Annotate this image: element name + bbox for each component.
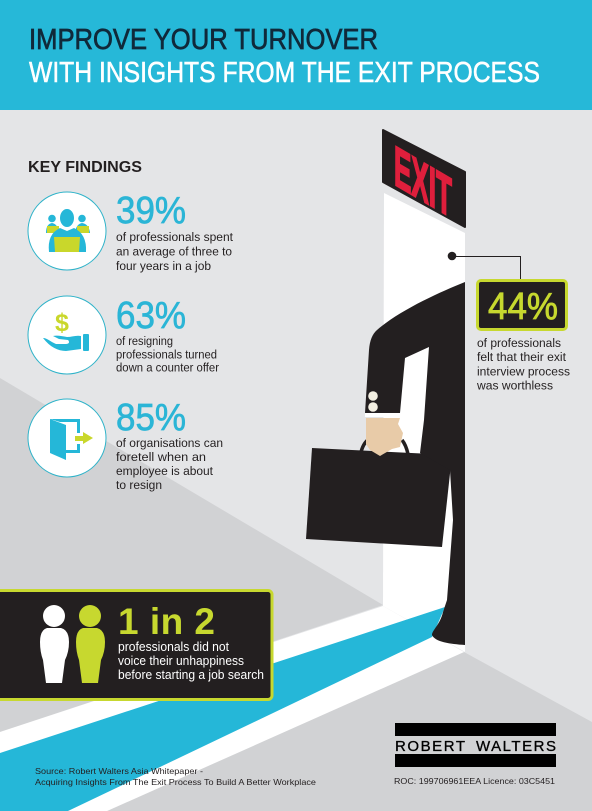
icon: team with laptop (28, 192, 106, 270)
businessman with briefcase (306, 282, 465, 645)
description (476, 336, 570, 392)
description: employee is about (116, 464, 214, 478)
description: professionals turned (116, 348, 217, 362)
description: of resigning (116, 334, 173, 348)
heading: key findings: KEY FINDINGS (28, 159, 142, 176)
white light path (0, 606, 464, 811)
white door opening (383, 193, 465, 652)
stat: 63%: 63% (116, 295, 186, 337)
description: voice their unhappiness (118, 653, 244, 668)
description: professionals did not (118, 639, 229, 654)
description (116, 334, 219, 374)
description: was worthless (476, 378, 553, 392)
description: down a counter offer (116, 360, 219, 374)
jacket and leg (365, 282, 465, 645)
briefcase handle (361, 438, 408, 454)
icon: hand with dollar: $ (55, 309, 69, 337)
right floor shade (107, 652, 592, 811)
jacket buttons (368, 391, 378, 412)
briefcase (306, 448, 452, 547)
registration text: ROC: 199706961EEA Licence: 03C5451 (394, 776, 555, 786)
description: four years in a job (116, 259, 211, 273)
shirt cuff (365, 413, 400, 417)
leader line (452, 256, 520, 281)
hand (366, 418, 403, 456)
description: to resign (116, 478, 162, 492)
left floor shade (0, 378, 383, 732)
stat: 39%: 39% (116, 190, 186, 232)
exit sign (383, 130, 465, 230)
exit sign: EXIT (394, 133, 452, 230)
description (118, 639, 264, 682)
source note: Acquiring Insights From The Exit Process To Build A Better Workplace (35, 777, 316, 787)
description: of organisations can (116, 436, 223, 450)
floor and door-light shapes (0, 193, 592, 811)
finding 1: 39% (28, 190, 234, 273)
stat: 44%: 44% (488, 286, 558, 328)
header band (0, 0, 592, 110)
description: foretell when an (116, 450, 206, 464)
description: interview process (477, 364, 570, 378)
icon: lime person (76, 605, 105, 683)
description: before starting a job search (118, 667, 264, 682)
logo: Robert Walters: WALTERS (476, 738, 556, 755)
description: an average of three to (116, 244, 232, 258)
blue carpet path (0, 607, 445, 811)
icon: white person (40, 605, 69, 683)
stat box (478, 280, 566, 330)
finding 3: 85% (28, 397, 223, 492)
description (116, 436, 223, 492)
description: of professionals (477, 336, 561, 350)
icon: hand with dollar (28, 296, 106, 374)
callout: 44% (448, 252, 570, 392)
logo: Robert Walters: ROBERT (395, 738, 465, 755)
description: of professionals spent (116, 230, 234, 244)
logo: Robert Walters (395, 723, 556, 767)
source note: Source: Robert Walters Asia Whitepaper - (35, 766, 203, 776)
source note (35, 766, 316, 787)
title line 1: IMPROVE YOUR TURNOVER (29, 24, 378, 56)
stat: 1 in 2: 1 in 2 (118, 601, 215, 642)
icon: exit door with arrow (28, 399, 106, 477)
finding 2: 63% (28, 295, 219, 374)
stat: 85%: 85% (116, 397, 186, 439)
description: felt that their exit (477, 350, 567, 364)
description (116, 230, 234, 273)
leader dot (448, 252, 456, 260)
panel: 1 in 2 (0, 590, 272, 700)
